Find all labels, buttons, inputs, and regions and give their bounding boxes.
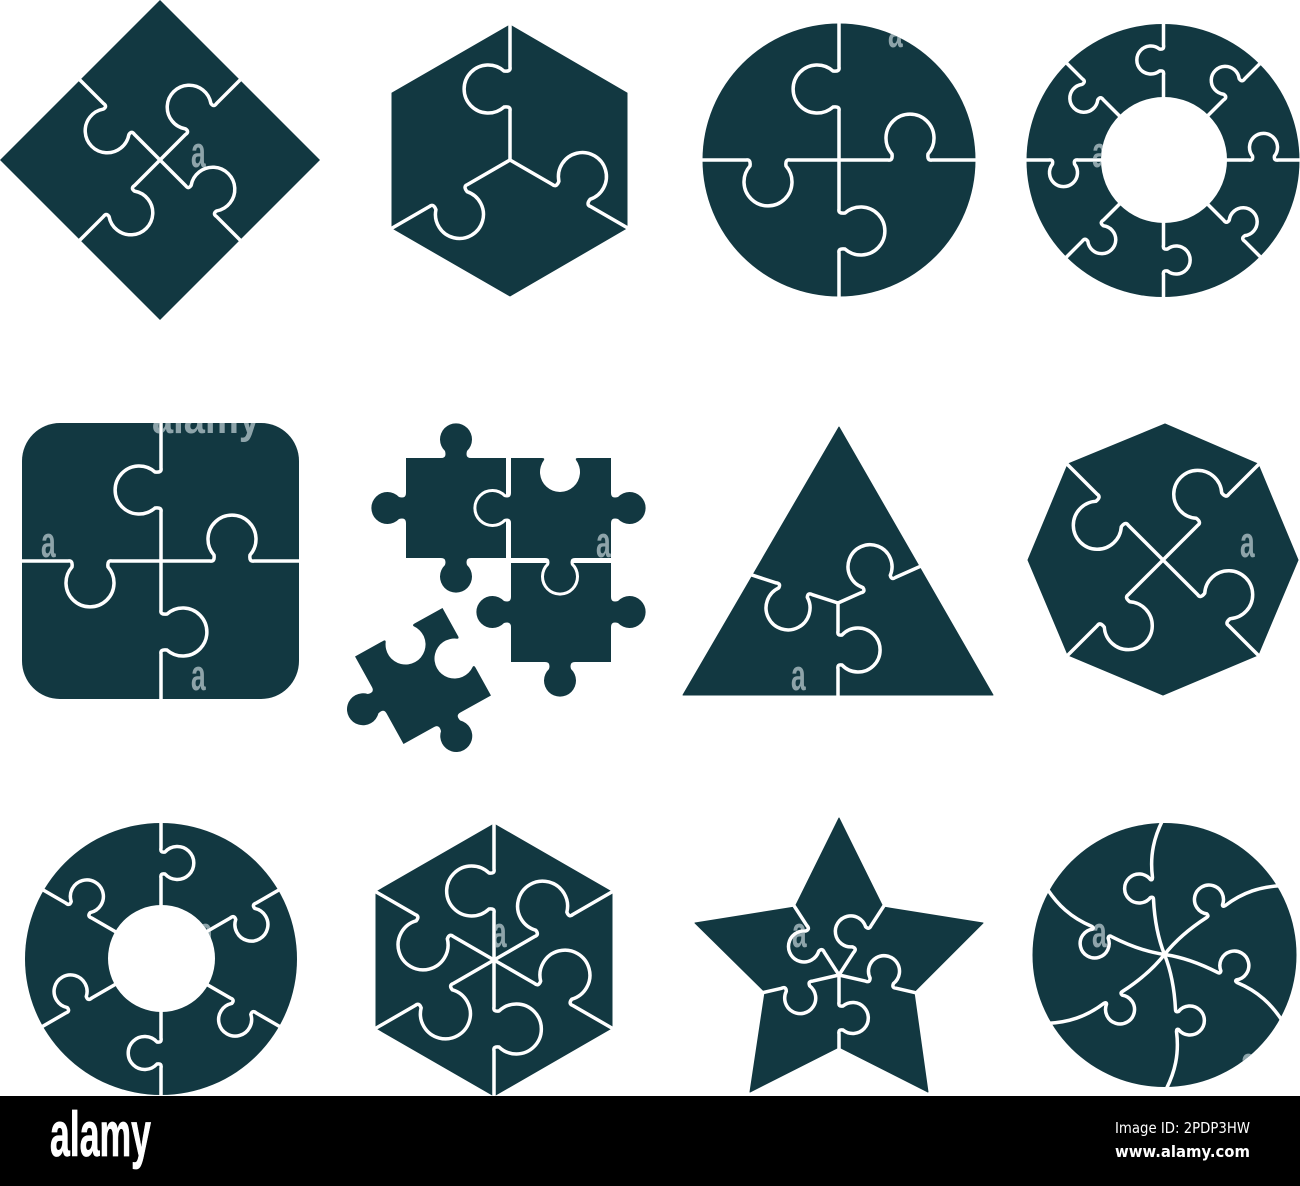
watermark glyphs: a [1241,1037,1256,1087]
rounded square puzzle, four pieces [19,419,303,703]
footer bar [0,1096,1300,1186]
watermark glyphs: a [791,650,806,700]
image id: Image ID: 2PDP3HW [1115,1119,1250,1137]
website: www.alamy.com [1115,1142,1250,1161]
hexagon puzzle, three pieces [387,18,656,296]
watermark glyphs: a [596,517,611,567]
watermark glyphs: a [492,907,507,957]
piece: detached and rotated [325,608,508,791]
ring puzzle, eight pieces [1024,20,1300,300]
hexagon puzzle, six pieces [347,818,641,1102]
piece: top right [476,458,646,593]
piece: top left [371,423,506,593]
circle puzzle, four pieces [697,18,981,302]
watermark glyphs: a [1092,127,1107,177]
watermark glyphs: a [1240,517,1255,567]
star puzzle, five pieces [695,818,983,1092]
ring puzzle, six pieces [22,816,300,1100]
watermark glyphs: a [191,127,206,177]
circle puzzle, six curved pieces [1029,820,1300,1088]
diamond puzzle, four pieces [0,0,320,320]
watermark glyphs: a [888,7,903,57]
loose jigsaw pieces [325,423,646,791]
watermark glyphs: a [198,907,213,957]
watermark glyphs: a [792,907,807,957]
watermark glyphs: a [1092,907,1107,957]
triangle puzzle, three pieces [683,427,993,703]
watermark glyphs: a [191,650,206,700]
logo wordmark: alamy [50,1100,151,1170]
watermark glyphs: a [41,517,56,567]
octagon puzzle, four pieces [1028,424,1298,695]
watermark glyphs: alamy [152,394,260,443]
piece: lower right [476,563,646,697]
